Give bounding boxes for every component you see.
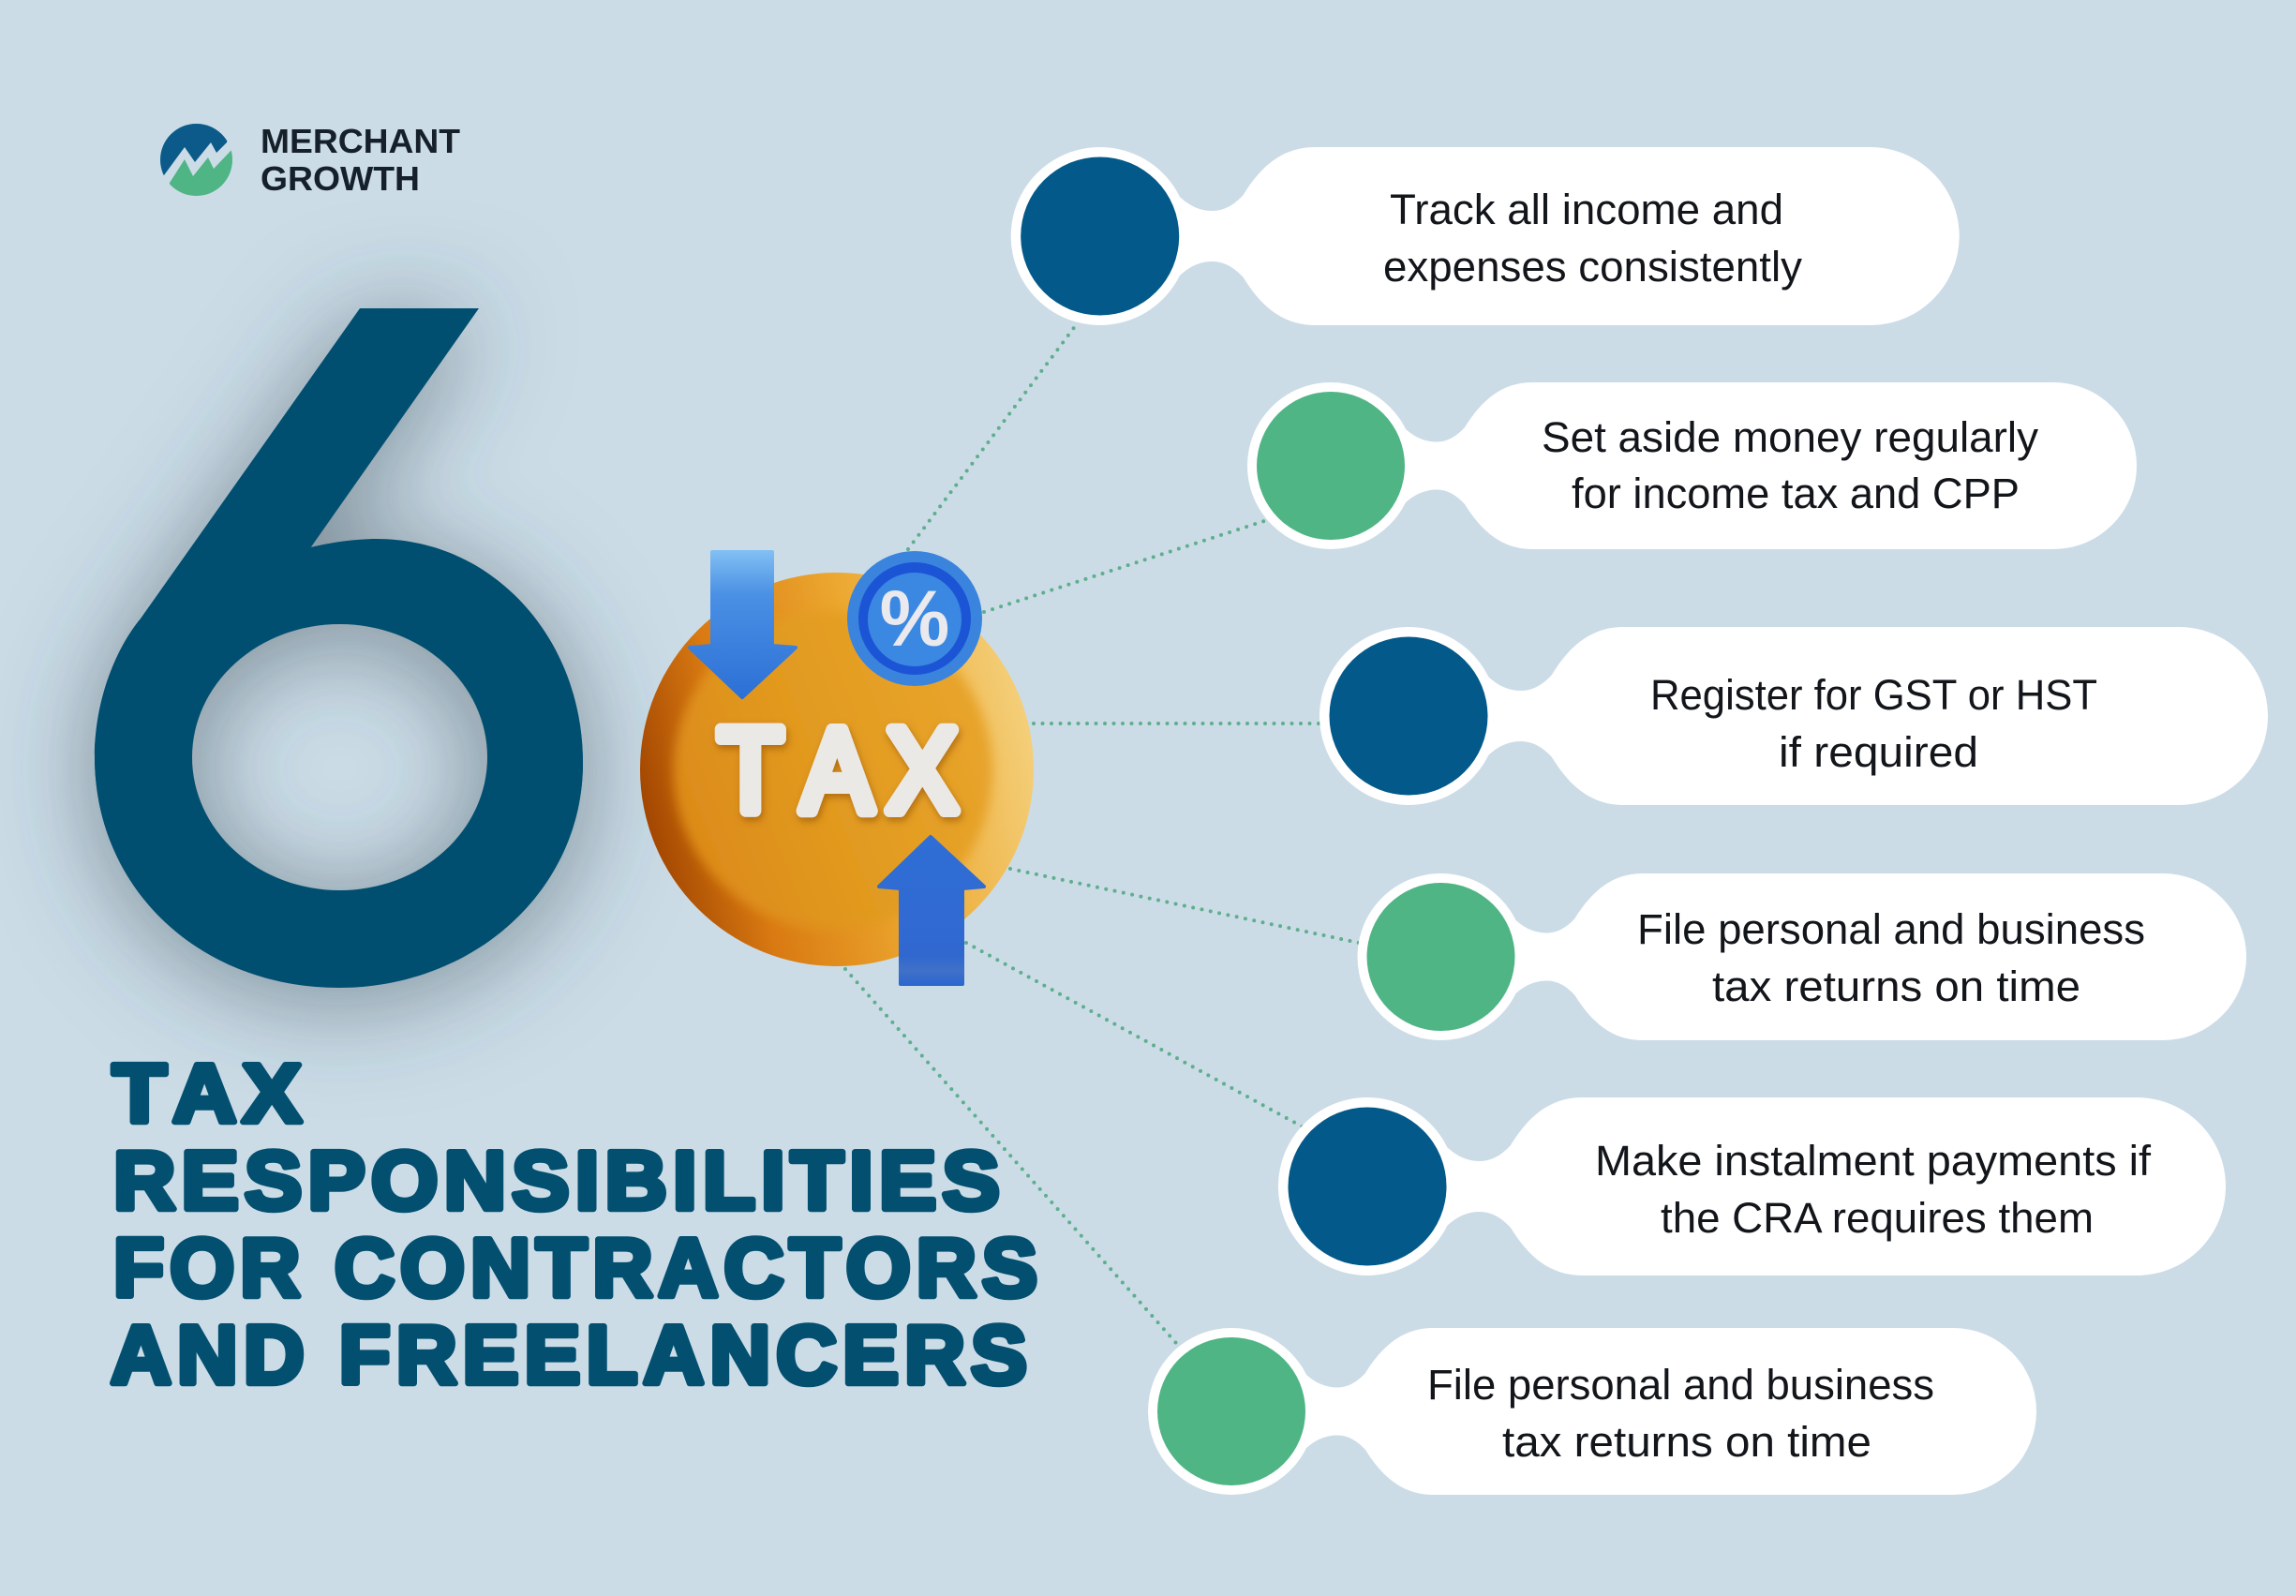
- coin label: TAX: [719, 706, 958, 836]
- icon: logo mark: [160, 124, 232, 196]
- title: FOR CONTRACTORS: [113, 1221, 1043, 1314]
- item text: [1427, 1361, 1934, 1466]
- panel: item 1: [1011, 147, 1960, 325]
- item text: [1542, 413, 2038, 517]
- marker: [1257, 392, 1405, 540]
- coin: [640, 573, 1034, 966]
- item text: Register for GST or HST: [1650, 671, 2097, 719]
- item text: expenses consistently: [1383, 243, 1803, 291]
- item text: File personal and business: [1637, 905, 2145, 953]
- panel: item 2: [1247, 382, 2137, 549]
- logo: Merchant Growth: [160, 124, 460, 196]
- item text: for income tax and CPP: [1572, 470, 2020, 517]
- marker: [1288, 1108, 1447, 1265]
- title: [111, 1047, 1043, 1401]
- marker: [1329, 637, 1488, 795]
- logo wordmark: [261, 122, 460, 198]
- marker: [1366, 883, 1514, 1031]
- item text: [1595, 1137, 2152, 1242]
- panel: item 3: [1319, 627, 2268, 805]
- item text: the CRA requires them: [1661, 1194, 2094, 1242]
- icon: down arrow: [690, 552, 796, 697]
- icon: percent badge: %: [880, 574, 949, 663]
- logo wordmark: MERCHANT: [261, 122, 460, 160]
- item text: [1650, 671, 2097, 776]
- icon: percent badge: [847, 551, 982, 686]
- item text: if required: [1779, 728, 1978, 776]
- item text: Make instalment payments if: [1595, 1137, 2152, 1185]
- title: AND FREELANCERS: [111, 1308, 1033, 1401]
- item text: [1383, 186, 1803, 291]
- title: RESPONSIBILITIES: [113, 1134, 1006, 1227]
- marker: [1157, 1337, 1305, 1485]
- logo wordmark: GROWTH: [261, 159, 420, 198]
- item text: Track all income and: [1390, 186, 1783, 233]
- panel: item 4: [1357, 873, 2246, 1040]
- panel: item 5: [1278, 1097, 2226, 1275]
- item text: File personal and business: [1427, 1361, 1934, 1409]
- big numeral 6: 6: [16, 109, 648, 1166]
- icon: up arrow: [879, 837, 984, 984]
- icon: tax coin with arrows and percent badge: [640, 551, 1034, 984]
- title: TAX: [112, 1047, 307, 1140]
- item text: Set aside money regularly: [1542, 413, 2038, 461]
- panel: item 6: [1148, 1328, 2036, 1495]
- marker: [1021, 157, 1179, 315]
- item text: tax returns on time: [1712, 962, 2080, 1010]
- item text: [1637, 905, 2145, 1010]
- dotted connector lines: [845, 325, 1359, 1350]
- item text: tax returns on time: [1502, 1418, 1871, 1466]
